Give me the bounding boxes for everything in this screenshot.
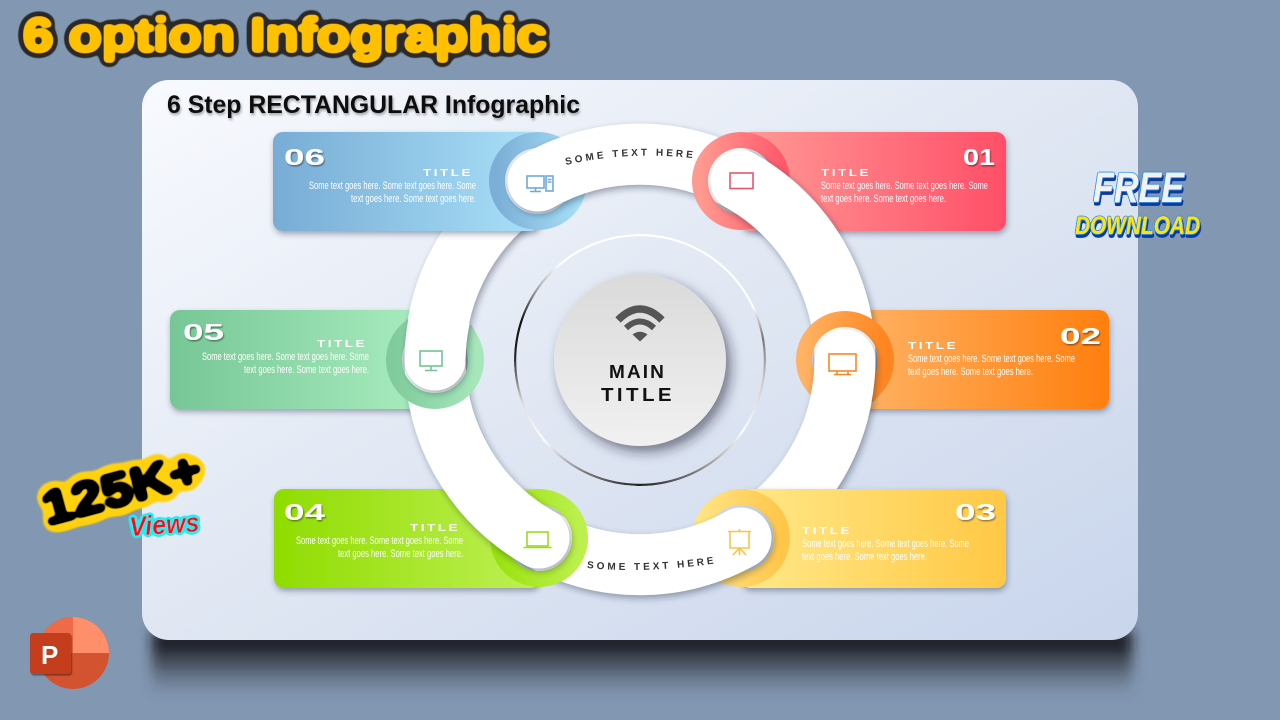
centre disc	[554, 274, 726, 446]
title 01: TITLE	[821, 167, 871, 179]
page title: 6 option Infographic	[23, 8, 547, 61]
number 02: 02	[1060, 323, 1101, 349]
ring 01	[700, 140, 782, 222]
icon: presentation board	[728, 529, 751, 555]
band: 01 to 02	[741, 181, 845, 360]
body 03: Some text goes here. Some text goes here. Some	[802, 538, 969, 550]
title 05: TITLE	[317, 338, 367, 350]
body 01: Some text goes here. Some text goes here. Some	[821, 180, 988, 192]
card 01	[741, 132, 1006, 231]
icon: desktop computer	[527, 176, 553, 192]
card 05	[170, 310, 435, 409]
number 03: 03	[955, 499, 996, 525]
body 06: Some text goes here. Some text goes here. Some	[309, 180, 476, 192]
icon: monitor green	[420, 351, 442, 370]
number 01: 01	[963, 144, 995, 170]
body 04	[296, 535, 463, 560]
icon: tablet	[730, 173, 753, 188]
icon: PowerPoint logo	[30, 617, 109, 689]
panel shadow	[152, 630, 1132, 696]
body 03	[802, 538, 969, 563]
body 01	[821, 180, 988, 205]
panel heading: 6 Step RECTANGULAR Infographic	[167, 91, 580, 119]
title 02: TITLE	[908, 340, 958, 352]
number 05: 05	[183, 319, 224, 345]
band: 02 to 03	[741, 360, 845, 538]
ring 06	[497, 140, 579, 222]
ring 05	[394, 319, 476, 401]
icon: monitor orange	[829, 354, 856, 374]
band: 05 to 06	[435, 181, 538, 360]
main title	[601, 362, 675, 405]
body 05: Some text goes here. Some text goes here. Some	[202, 351, 369, 363]
ring 02	[804, 319, 886, 401]
main title: MAIN	[609, 362, 666, 382]
band: 04 to 05	[435, 360, 539, 538]
icon: PowerPoint logo: P	[41, 640, 58, 670]
ring 03	[700, 497, 782, 579]
card 02	[845, 310, 1109, 409]
free download badge	[1075, 164, 1200, 240]
main panel	[142, 80, 1138, 640]
card 04	[274, 489, 540, 588]
body 02: Some text goes here. Some text goes here. Some	[908, 353, 1075, 365]
curved text bottom: SOME TEXT HERE	[587, 556, 714, 570]
free download badge: DOWNLOAD	[1075, 212, 1200, 240]
icon: laptop	[524, 532, 552, 548]
band: 02 start overlay	[828, 360, 845, 440]
number 06: 06	[284, 144, 325, 170]
card 06	[273, 132, 540, 231]
body 03: text goes here. Some text goes here.	[802, 551, 927, 563]
views badge: 125K+	[36, 442, 207, 535]
title 03: TITLE	[802, 525, 852, 537]
body 05: text goes here. Some text goes here.	[244, 364, 369, 376]
ring interior backdrops	[401, 147, 879, 572]
band: 05 start overlay	[435, 280, 452, 360]
number 04: 04	[284, 499, 325, 525]
body 02	[908, 353, 1075, 378]
ring interior backdrops 06 and 03	[504, 147, 775, 572]
card 03	[741, 489, 1006, 588]
title 06: TITLE	[423, 167, 473, 179]
body 02: text goes here. Some text goes here.	[908, 366, 1033, 378]
icon: wifi	[618, 309, 662, 342]
main title: TITLE	[601, 385, 675, 405]
curved text top: SOME TEXT HERE	[566, 148, 693, 164]
free download badge: FREE	[1093, 164, 1185, 212]
title 04: TITLE	[410, 522, 460, 534]
band: 06 to 01	[538, 154, 741, 181]
body 06: text goes here. Some text goes here.	[351, 193, 476, 205]
band: 03 to 04	[539, 538, 741, 565]
views badge: Views	[128, 507, 200, 542]
body 04: text goes here. Some text goes here.	[338, 548, 463, 560]
body 06	[309, 180, 476, 205]
body 01: text goes here. Some text goes here.	[821, 193, 946, 205]
body 05	[202, 351, 369, 376]
metallic thin ring	[514, 234, 766, 486]
ring 04	[498, 497, 580, 579]
body 04: Some text goes here. Some text goes here. Some	[296, 535, 463, 547]
